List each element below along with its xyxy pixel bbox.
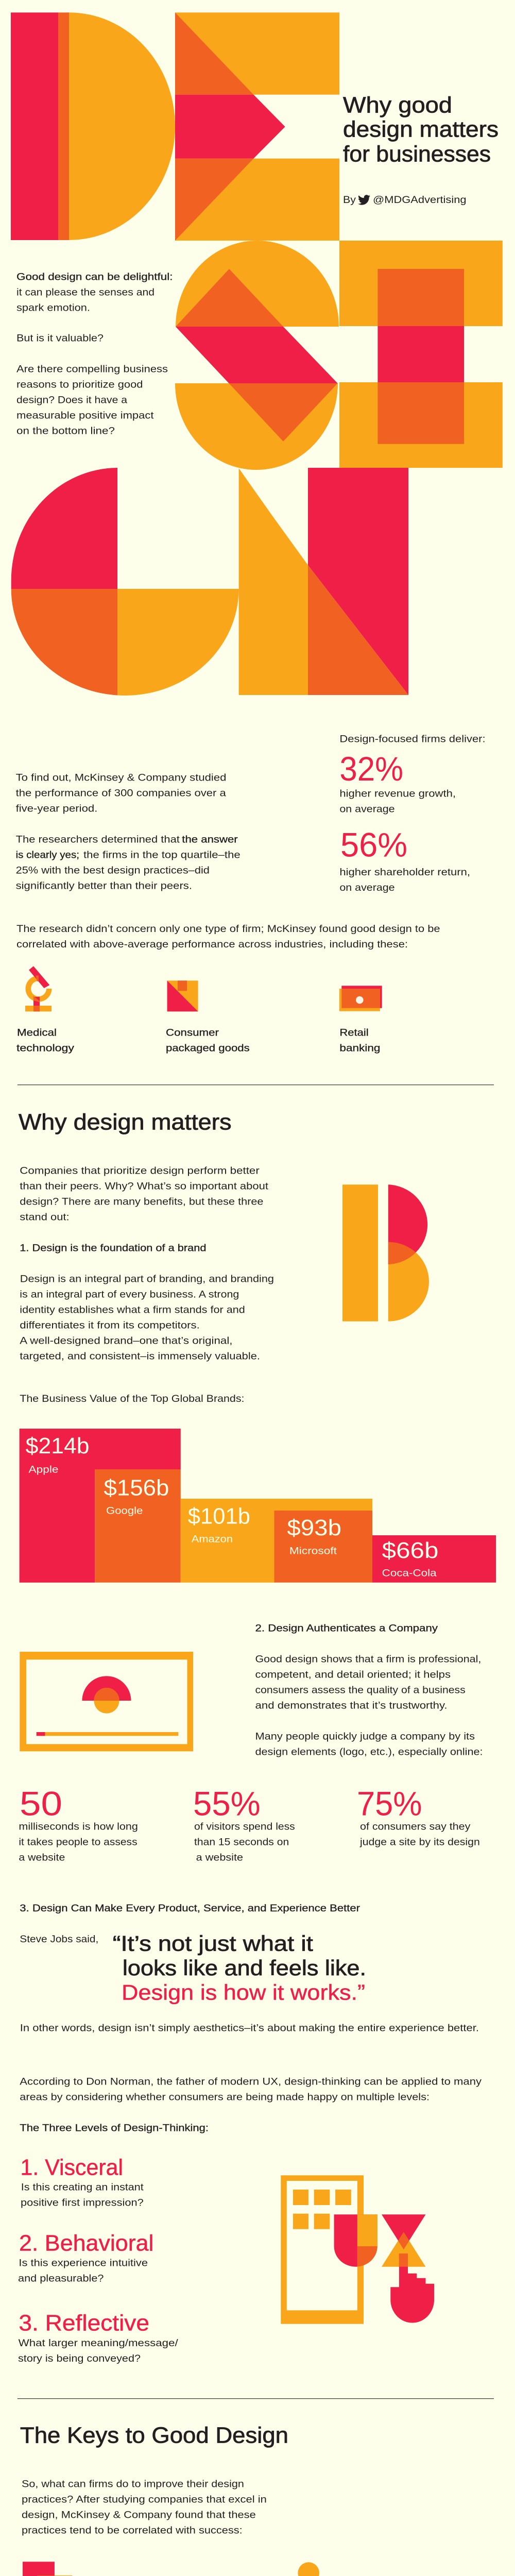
paragraph: branding: identity establishes what a firm stands for and [20,1304,245,1315]
stat: 55 percent [193,1784,295,1863]
intro paragraph: why design matters: Companies that prioritize design perform better [20,1165,260,1176]
bar: Apple: Apple [29,1464,59,1475]
bar: Amazon [181,1499,372,1583]
text: Don Norman: areas by considering whether consumers are being made happy on multiple levels: [20,2092,430,2103]
level 1: visceral: positive first impression? [21,2197,144,2209]
intro paragraph: why design matters [20,1165,269,1223]
stats: design-focused firms: Design-focused firms deliver: [339,734,486,745]
stats: design-focused firms: 56% [340,826,407,864]
letter I (T-shaped) [339,241,503,468]
text: Don Norman [20,2076,482,2103]
pull quote: “It’s not just what it [113,1931,313,1956]
paragraph: authentication: and demonstrates that it’s trustworthy. [255,1700,448,1711]
McKinsey study text: the answer [182,834,238,845]
McKinsey study text: is clearly yes; [16,850,79,861]
research scope text: correlated with above-average performance across industries, including these: [16,939,408,950]
letter S [175,241,339,470]
label: medical technology: technology [16,1043,74,1054]
intro paragraph: why design matters: design? There are many benefits, but these three [20,1196,264,1207]
stats: design-focused firms [339,734,486,893]
stat: 55 percent: 55% [193,1784,261,1822]
McKinsey study text: the firms in the top quartile–the [83,850,241,861]
pull quote: Design is how it works.” [122,1980,365,2005]
paragraph: branding: differentiates it from its competitors. [20,1319,200,1331]
letter U [11,468,239,696]
chart title: The Business Value of the Top Global Brands: [20,1393,244,1404]
title: design matters [343,117,499,142]
stat: 50 milliseconds [19,1784,138,1863]
level 2: behavioral [18,2230,153,2284]
intro paragraph: why design matters: stand out: [20,1211,70,1223]
subheading: three levels: The Three Levels of Design-Thinking: [20,2123,209,2134]
intro paragraph: keys: So, what can firms do to improve their design [22,2479,244,2490]
byline with twitter handle: @MDGAdvertising [373,194,467,206]
subheading: design is the foundation: 1. Design is the foundation of a brand [20,1242,207,1253]
stat: 50 milliseconds: milliseconds is how long [19,1821,138,1833]
icon: letter B [342,1184,429,1321]
intro text: Are there compelling business [16,364,168,375]
paragraph: authentication: consumers assess the quality of a business [255,1685,466,1696]
paragraph: authentication: design elements (logo, etc.), especially online: [255,1747,483,1758]
stat: 75 percent: 75% [357,1784,422,1822]
level 2: behavioral: and pleasurable? [18,2273,104,2284]
McKinsey study text: the performance of 300 companies over a [16,788,226,799]
icon: person (no silos) [298,2562,319,2576]
McKinsey study text: five-year period. [16,803,97,815]
paragraph: branding: A well-designed brand–one that’s original, [20,1335,233,1346]
stats: design-focused firms: 32% [339,750,403,788]
level 3: reflective [18,2310,178,2364]
pull quote: looks like and feels like. [123,1956,366,1980]
label: retail banking: banking [339,1043,380,1054]
bar: Amazon: Amazon [192,1534,233,1545]
stats: design-focused firms: higher shareholder return, [339,867,470,878]
bar: Google: $156b [104,1475,169,1500]
stat: 75 percent [357,1784,480,1848]
label: medical technology: Medical [17,1027,57,1039]
bar: Google: Google [106,1505,143,1516]
level 1: visceral: Is this creating an instant [21,2182,144,2193]
subheading: design authenticates: 2. Design Authenticates a Company [255,1623,438,1634]
bar: Google [95,1469,181,1583]
title: Why good [343,92,452,117]
icon: metrics [23,2562,72,2576]
icon: package [167,980,198,1011]
intro text: Good design can be delightful: [16,271,173,282]
paragraph: authentication: Many people quickly judge a company by its [255,1731,475,1742]
byline with twitter handle: By [343,194,356,206]
subheading: design makes everything better: 3. Design Can Make Every Product, Service, and Experience Better [20,1903,360,1914]
attribution: Steve Jobs: Steve Jobs said, [20,1934,98,1945]
level 3: reflective: story is being conveyed? [18,2353,141,2364]
research scope text [16,923,440,950]
label: consumer packaged goods [166,1027,250,1054]
icon: microscope [25,966,52,1011]
bar: Coca-Cola [372,1535,496,1583]
label: consumer packaged goods: Consumer [166,1027,219,1039]
level 3: reflective: 3. Reflective [19,2310,149,2335]
heading: why design matters: Why design matters [19,1109,232,1134]
stat: 50 milliseconds: 50 [20,1784,62,1822]
paragraph: authentication: competent, and detail oriented; it helps [255,1669,451,1681]
heading: the keys to good design: The Keys to Good Design [20,2423,288,2448]
intro paragraph: keys: practices tend to be correlated with success: [22,2525,243,2536]
intro text [16,271,173,437]
intro text: design? Does it have a [16,395,127,406]
paragraph: branding: targeted, and consistent–is immensely valuable. [20,1350,260,1362]
stats: design-focused firms: on average [339,882,395,893]
intro paragraph: keys: design, McKinsey & Company found that these [22,2510,256,2521]
intro text: measurable positive impact [16,410,154,421]
label: consumer packaged goods: packaged goods [166,1043,250,1054]
letter E [175,12,339,241]
McKinsey study text: 25% with the best design practices–did [16,865,210,876]
stat: 55 percent: of visitors spend less [194,1821,295,1833]
bar: Amazon: $101b [188,1503,250,1529]
stats: design-focused firms: higher revenue growth, [339,788,456,800]
text: in other words: In other words, design isn’t simply aesthetics–it’s about making the entire experience better. [20,2022,479,2033]
bar: Coca-Cola: Coca-Cola [382,1568,437,1579]
paragraph: branding: is an integral part of every business. A strong [20,1289,239,1300]
level 3: reflective: What larger meaning/message/ [19,2337,178,2349]
level 1: visceral: 1. Visceral [21,2155,123,2180]
intro text: it can please the senses and [16,286,154,298]
text: Don Norman: According to Don Norman, the father of modern UX, design-thinking can be applied to many [20,2076,482,2088]
bar: Microsoft: $93b [287,1515,341,1540]
paragraph: branding: Design is an integral part of branding, and branding [20,1273,274,1284]
title [343,92,499,166]
title: for businesses [343,141,491,166]
stat: 75 percent: of consumers say they [360,1821,471,1833]
bar chart: brand values [20,1429,496,1583]
McKinsey study text: significantly better than their peers. [16,880,192,892]
McKinsey study text [16,772,241,892]
research scope text: The research didn’t concern only one type of firm; McKinsey found good design to be [16,923,440,935]
intro paragraph: why design matters: than their peers. Why? What’s so important about [20,1180,269,1192]
byline with twitter handle [343,194,467,206]
bar: Coca-Cola: $66b [382,1538,438,1563]
stat: 50 milliseconds: a website [19,1852,65,1863]
icon: wallet [339,986,382,1011]
paragraph: authentication: Good design shows that a firm is professional, [255,1654,481,1665]
intro text: reasons to prioritize good [16,379,143,391]
icon: phone with UX letters [281,2175,434,2324]
level 2: behavioral: Is this experience intuitive [19,2257,148,2268]
stat: 50 milliseconds: it takes people to assess [19,1837,138,1848]
bar: Microsoft [274,1511,372,1583]
bar: Microsoft: Microsoft [289,1546,337,1557]
level 1: visceral [21,2155,144,2209]
label: retail banking: Retail [339,1027,369,1039]
intro paragraph: keys: practices? After studying companies that excel in [22,2494,267,2505]
intro text: on the bottom line? [16,426,115,437]
bar: Apple [20,1429,181,1583]
label: retail banking [339,1027,380,1054]
McKinsey study text: The researchers determined that [16,834,180,845]
paragraph: branding [20,1273,274,1362]
icon: browser screen [20,1652,193,1751]
intro text: spark emotion. [16,302,90,313]
bar: Apple: $214b [26,1433,90,1459]
letter D [11,12,175,240]
label: medical technology [16,1027,74,1054]
pull quote [113,1931,366,2005]
paragraph: authentication [255,1654,483,1758]
stats: design-focused firms: on average [339,804,395,815]
McKinsey study text: To find out, McKinsey & Company studied [16,772,226,784]
level 2: behavioral: 2. Behavioral [19,2230,153,2256]
stat: 55 percent: a website [196,1852,243,1863]
intro paragraph: keys [22,2479,267,2536]
intro text: But is it valuable? [16,333,104,344]
stat: 55 percent: than 15 seconds on [194,1837,289,1848]
stat: 75 percent: judge a site by its design [359,1837,480,1848]
letter N [239,468,408,695]
